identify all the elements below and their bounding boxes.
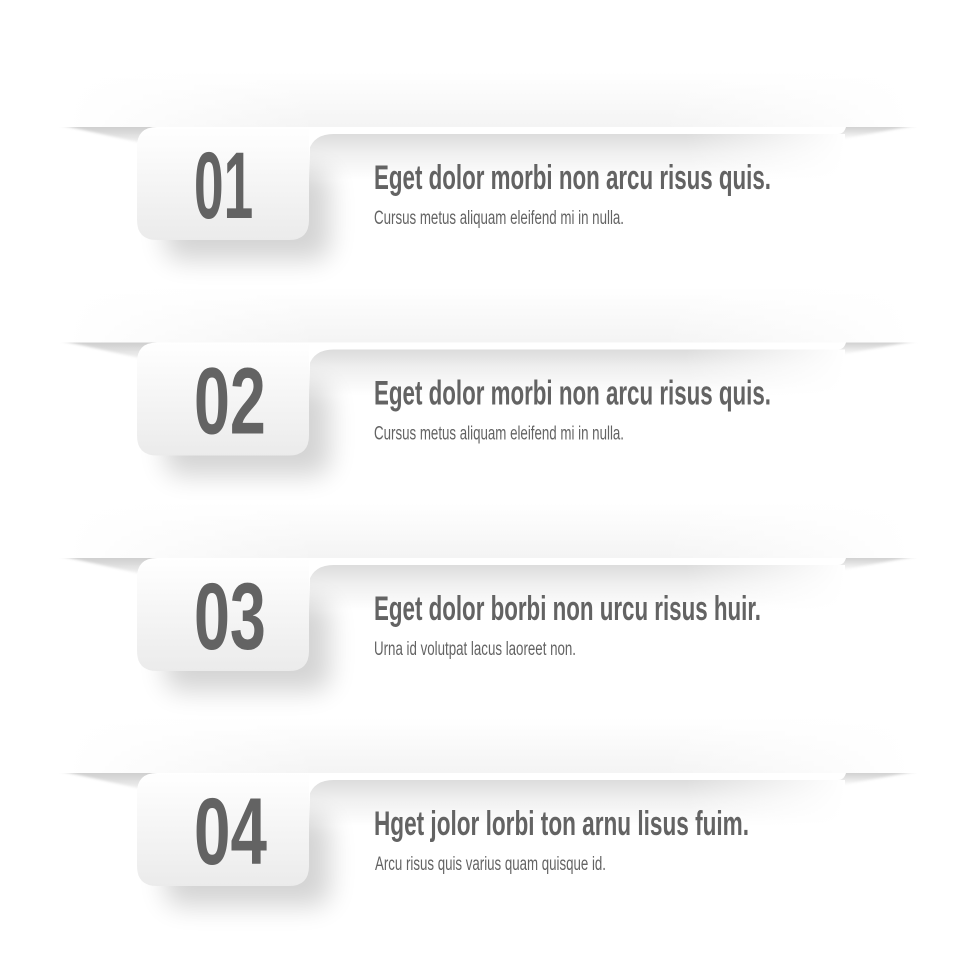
number: 01: [194, 133, 253, 239]
subtext: Cursus metus aliquam eleifend mi in nulla.: [374, 208, 624, 229]
number tab: [137, 558, 309, 671]
shadow below band: [310, 780, 845, 827]
number tab: [137, 342, 309, 456]
top shadow: [67, 288, 912, 344]
number: 04: [194, 779, 267, 885]
panel: row 3: [65, 544, 912, 702]
subtext: Urna id volutpat lacus laoreet non.: [374, 639, 576, 660]
heading: Eget dolor morbi non arcu risus quis.: [374, 374, 771, 412]
heading: Eget dolor morbi non arcu risus quis.: [374, 159, 771, 197]
shadow below band: [310, 350, 845, 396]
white band: [300, 773, 846, 796]
heading: Hget jolor lorbi ton arnu lisus fuim.: [374, 805, 749, 843]
top shadow: [67, 72, 912, 128]
white band: [300, 127, 846, 150]
heading: Eget dolor borbi non urcu risus huir.: [374, 590, 761, 628]
white band: [300, 342, 846, 366]
panel: row 4: [65, 759, 912, 916]
panel: row 1: [65, 112, 912, 270]
tab shadow: [165, 816, 330, 906]
left wedge shadow: [65, 773, 156, 788]
right wedge shadow: [840, 773, 912, 784]
number tab: [137, 127, 309, 240]
subtext: Cursus metus aliquam eleifend mi in nulla.: [374, 424, 624, 444]
right wedge shadow: [840, 558, 912, 568]
tab shadow: [165, 601, 330, 691]
tab shadow: [165, 170, 330, 260]
right wedge shadow: [840, 342, 912, 353]
number tab: [137, 773, 309, 886]
panel: row 2: [65, 328, 912, 486]
number: 03: [194, 564, 266, 670]
right wedge shadow: [840, 127, 912, 138]
tab shadow: [165, 386, 330, 476]
subtext: Arcu risus quis varius quam quisque id.: [375, 854, 606, 875]
top shadow: [67, 718, 912, 774]
left wedge shadow: [65, 127, 156, 142]
top shadow: [67, 503, 912, 559]
left wedge shadow: [65, 342, 156, 358]
shadow below band: [310, 134, 845, 181]
white band: [300, 558, 846, 581]
shadow below band: [310, 565, 845, 612]
number: 02: [194, 348, 266, 455]
left wedge shadow: [65, 558, 156, 573]
